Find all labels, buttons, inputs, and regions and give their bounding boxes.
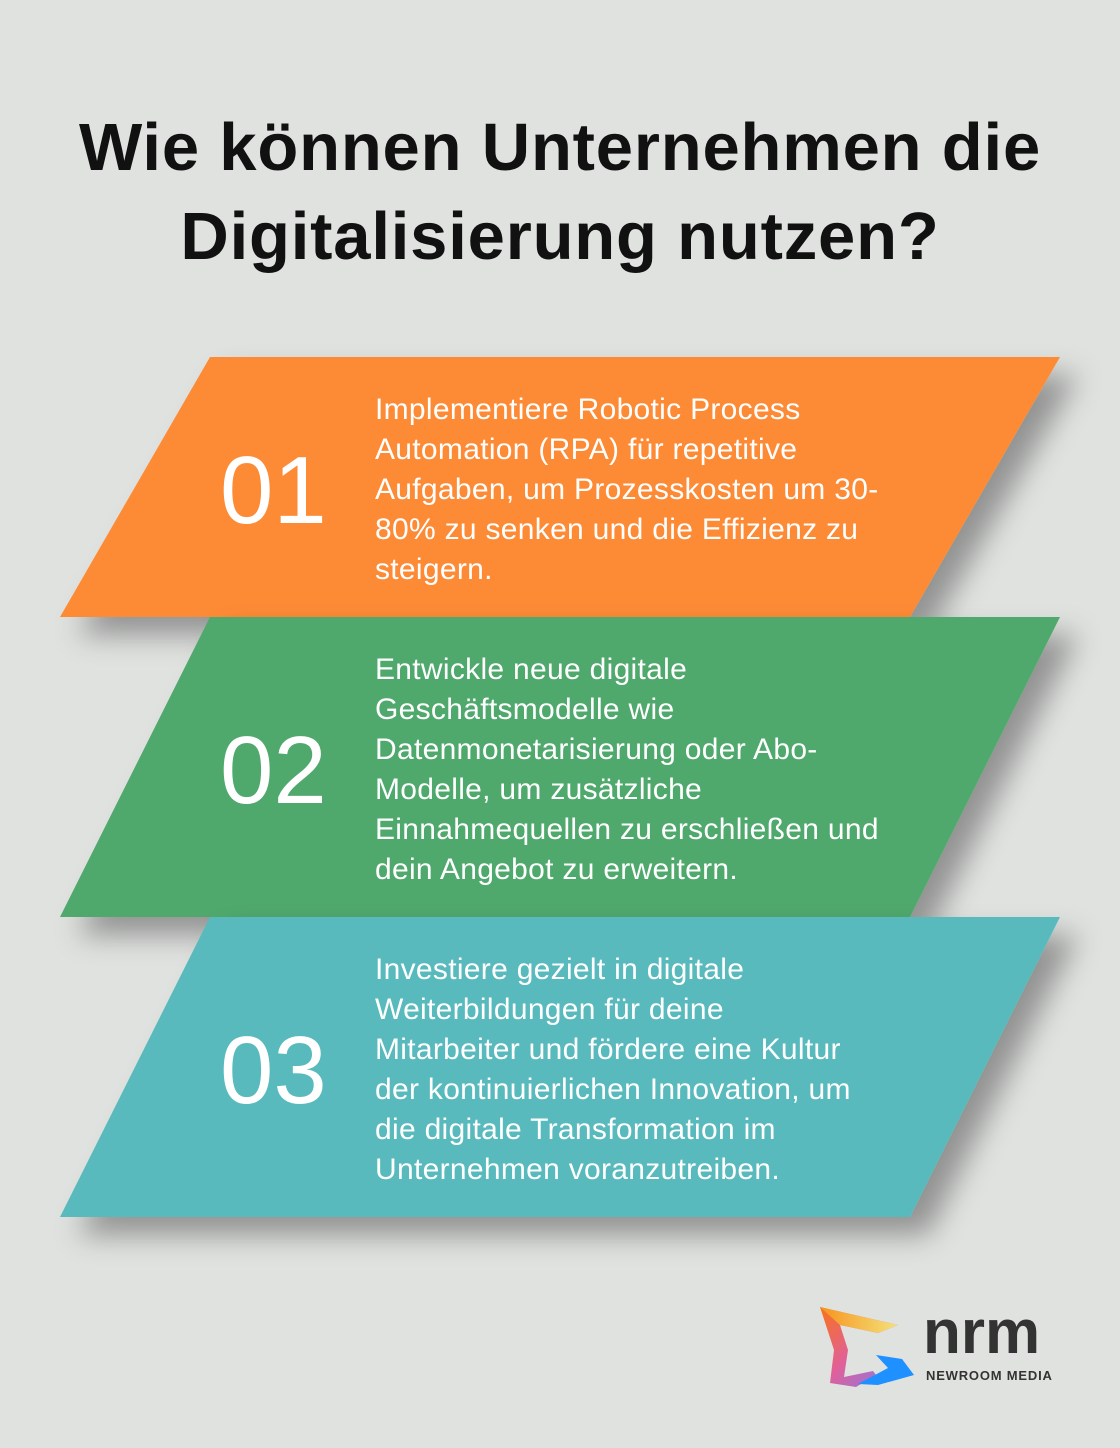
text step 1: Aufgaben, um Prozesskosten um 30- <box>375 473 878 506</box>
title: Digitalisierung nutzen? <box>180 199 940 274</box>
text step 1: Implementiere Robotic Process <box>375 393 801 426</box>
text step 1: Automation (RPA) für repetitive <box>375 433 797 466</box>
number 03: 03 <box>220 1017 327 1124</box>
text step 2: Geschäftsmodelle wie <box>375 693 674 726</box>
logo: NEWROOM MEDIA <box>926 1368 1053 1383</box>
logo text: nrm <box>923 1298 1040 1367</box>
panel: step 1 orange <box>60 357 1060 617</box>
text step 3: Investiere gezielt in digitale <box>375 953 744 986</box>
title: Wie können Unternehmen die <box>79 110 1041 185</box>
logo <box>820 1298 1053 1387</box>
text step 3: Unternehmen voranzutreiben. <box>375 1153 780 1186</box>
panel: step 2 green <box>60 617 1060 917</box>
text step 3 <box>375 953 851 1186</box>
text step 1 <box>375 393 878 586</box>
text step 1: steigern. <box>375 553 493 586</box>
text step 3: die digitale Transformation im <box>375 1113 776 1146</box>
text step 3: Weiterbildungen für deine <box>375 993 724 1026</box>
panel: step 3 teal <box>60 917 1060 1217</box>
text step 2 <box>375 653 879 886</box>
number 02: 02 <box>220 717 327 824</box>
title <box>79 110 1041 274</box>
text step 2: Datenmonetarisierung oder Abo- <box>375 733 818 766</box>
number 01: 01 <box>220 437 327 544</box>
text step 3: Mitarbeiter und fördere eine Kultur <box>375 1033 841 1066</box>
text step 1: 80% zu senken und die Effizienz zu <box>375 513 858 546</box>
text step 3: der kontinuierlichen Innovation, um <box>375 1073 851 1106</box>
text step 2: Modelle, um zusätzliche <box>375 773 702 806</box>
text step 2: Einnahmequellen zu erschließen und <box>375 813 879 846</box>
text step 2: dein Angebot zu erweitern. <box>375 853 738 886</box>
text step 2: Entwickle neue digitale <box>375 653 687 686</box>
icon: logo mark <box>820 1307 914 1387</box>
